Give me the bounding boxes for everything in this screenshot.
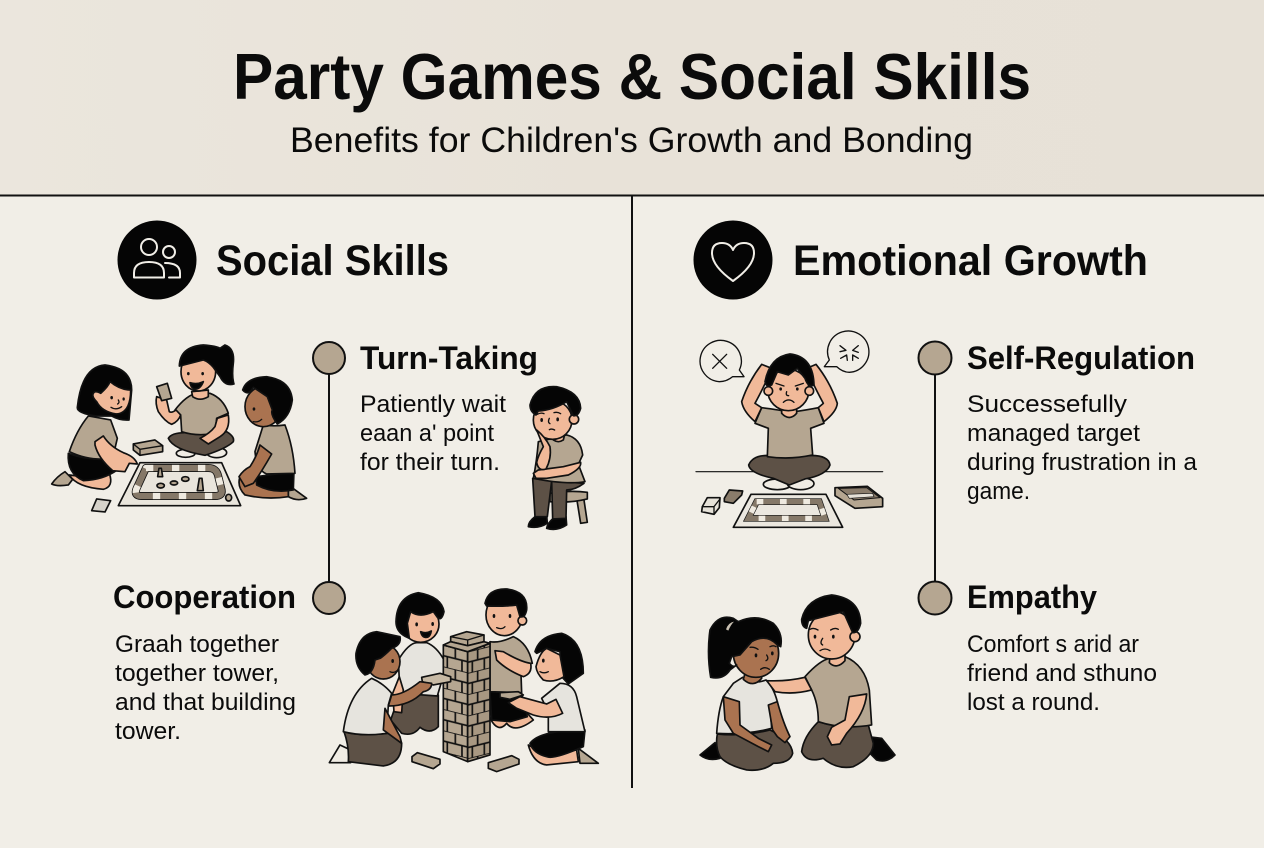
illustration: boy waiting on a stool (528, 387, 587, 529)
text: empathy (967, 579, 1157, 716)
icon: heart (694, 220, 772, 300)
panel: emotional growth (694, 220, 1198, 770)
title: Party Games & Social Skills (233, 40, 1031, 113)
illustration: frustrated boy at a board game (696, 331, 883, 527)
text: empathy: friend and sthuno (967, 660, 1157, 687)
board (118, 463, 241, 506)
sad girl (700, 743, 723, 759)
card on floor (92, 499, 111, 512)
text: empathy: lost a round. (967, 689, 1100, 716)
text: cooperation: tower. (115, 718, 181, 745)
text: self-regulation: Successefully (967, 391, 1127, 418)
illustration: boy comforting a sad friend (700, 595, 895, 770)
child front left (329, 745, 351, 763)
text: turn-taking: eaan a' point (360, 420, 494, 447)
text: empathy: Comfort s arid ar (967, 631, 1139, 658)
text: cooperation (113, 579, 296, 745)
boy (867, 737, 895, 761)
subtitle: Benefits for Children's Growth and Bonding (290, 121, 973, 160)
text: empathy: Empathy (967, 579, 1097, 615)
text: self-regulation: managed target (967, 420, 1140, 447)
illustration: children playing a board game (52, 345, 307, 512)
text: self-regulation: Self-Regulation (967, 340, 1195, 376)
stacked cards (702, 498, 720, 514)
text: self-regulation (967, 340, 1198, 505)
panel: social skills (52, 220, 598, 772)
heading: social skills: Social Skills (216, 237, 449, 285)
text: self-regulation: during frustration in a (967, 449, 1198, 476)
text: cooperation: and that building (115, 689, 296, 716)
header band (0, 0, 1264, 195)
illustration: children stacking a block tower (329, 589, 598, 772)
icon: people (118, 220, 196, 300)
boy right (288, 485, 307, 500)
text: turn-taking: for their turn. (360, 449, 500, 476)
child back right (491, 713, 533, 728)
timeline: social skills (313, 342, 345, 614)
girl left (52, 472, 73, 486)
text: turn-taking (360, 340, 538, 476)
child back left (391, 693, 438, 734)
text: cooperation: Cooperation (113, 579, 296, 615)
game box (835, 486, 883, 508)
tower (443, 645, 468, 762)
board (733, 494, 843, 527)
floor (696, 470, 883, 473)
box (133, 440, 163, 455)
timeline: emotional growth (918, 342, 952, 614)
text: turn-taking: Patiently wait (360, 391, 506, 418)
loose blocks (412, 753, 440, 769)
block being pulled (422, 673, 451, 685)
girl middle (176, 449, 195, 457)
text: turn-taking: Turn-Taking (360, 340, 538, 376)
heading: emotional growth: Emotional Growth (793, 237, 1148, 285)
text: self-regulation: game. (967, 478, 1030, 505)
text: cooperation: together tower, (115, 660, 279, 687)
speech bubble: anger (824, 331, 869, 372)
text: cooperation: Graah together (115, 631, 279, 658)
speech bubble: X (700, 340, 744, 382)
child front right (578, 748, 598, 763)
